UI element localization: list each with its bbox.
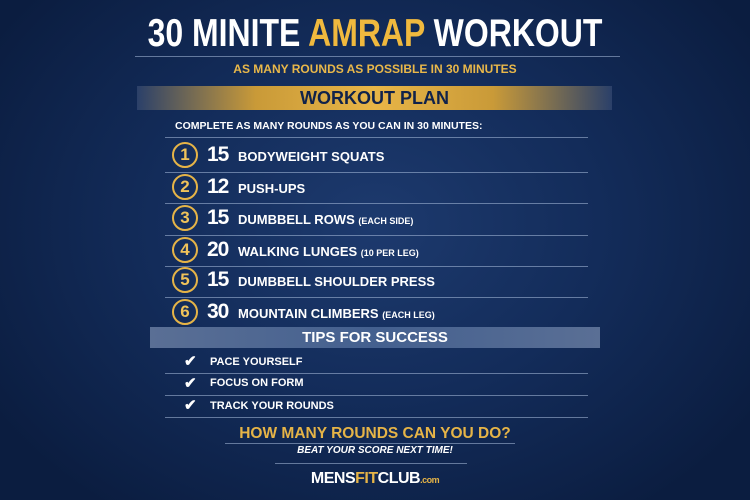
tip 3: TRACK YOUR ROUNDS: [210, 400, 334, 412]
exercise list: [165, 142, 588, 325]
exercise 6: MOUNTAIN CLIMBERS (EACH LEG): [238, 306, 435, 321]
tagline: BEAT YOUR SCORE NEXT TIME!: [297, 445, 453, 456]
tip 2: FOCUS ON FORM: [210, 377, 304, 389]
exercise 3: 3: [180, 208, 190, 227]
banner: workout plan: [137, 86, 612, 110]
exercise 3: DUMBBELL ROWS (EACH SIDE): [238, 212, 413, 227]
exercise 4: 4: [180, 240, 190, 259]
banner: tips for success: [150, 327, 600, 348]
logo: MENSFITCLUB.com: [311, 470, 439, 487]
exercise 1: 15: [207, 143, 228, 166]
banner: workout plan: WORKOUT PLAN: [300, 88, 449, 108]
tip 2: [184, 375, 304, 392]
title: 30 MINITE AMRAP WORKOUT: [148, 12, 602, 55]
exercise 2: PUSH-UPS: [238, 181, 305, 196]
exercise 6: 30: [207, 300, 228, 323]
exercise 1: BODYWEIGHT SQUATS: [238, 149, 384, 164]
exercise 2: 12: [207, 175, 228, 198]
exercise 3: 15: [207, 206, 228, 229]
call to action: HOW MANY ROUNDS CAN YOU DO?: [239, 425, 511, 442]
tip 2: ✔: [184, 375, 197, 392]
subtitle: AS MANY ROUNDS AS POSSIBLE IN 30 MINUTES: [233, 62, 517, 76]
instruction: COMPLETE AS MANY ROUNDS AS YOU CAN IN 30 MINUTES:: [175, 120, 482, 132]
exercise 1: 1: [180, 145, 190, 164]
exercise 4: WALKING LUNGES (10 PER LEG): [238, 244, 419, 259]
exercise 4: [172, 237, 419, 263]
exercise 2: 2: [180, 177, 190, 196]
tip 3: [184, 397, 334, 414]
exercise 3: [172, 205, 413, 231]
exercise 5: [172, 267, 435, 293]
exercise 4: 20: [207, 238, 228, 261]
banner: tips for success: TIPS FOR SUCCESS: [302, 329, 448, 346]
exercise 2: [172, 174, 305, 200]
exercise 6: [172, 299, 435, 325]
exercise 5: DUMBBELL SHOULDER PRESS: [238, 274, 435, 289]
exercise 1: [172, 142, 384, 168]
tip 1: ✔: [184, 353, 197, 370]
tip 3: ✔: [184, 397, 197, 414]
exercise 5: 5: [180, 270, 190, 289]
tips list: [165, 353, 588, 418]
tip 1: PACE YOURSELF: [210, 356, 302, 368]
tip 1: [184, 353, 302, 370]
exercise 6: 6: [180, 302, 190, 321]
exercise 5: 15: [207, 268, 228, 291]
